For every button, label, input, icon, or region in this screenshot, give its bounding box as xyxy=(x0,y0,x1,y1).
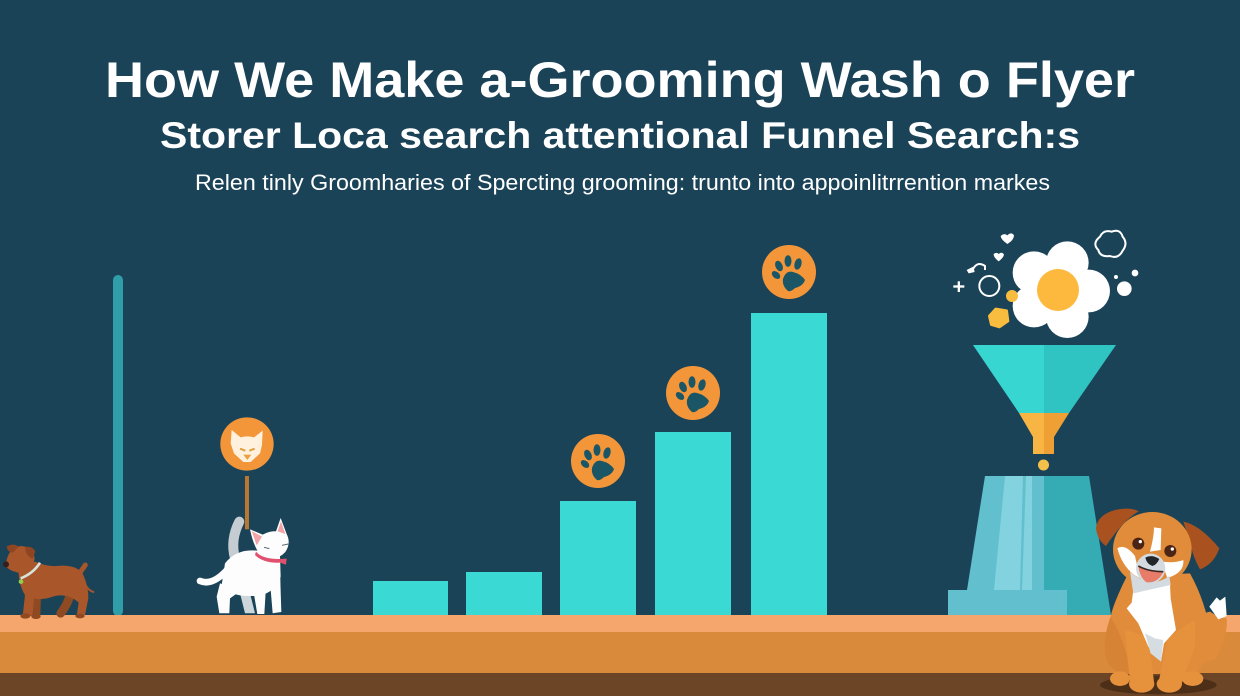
chart vertical axis xyxy=(113,275,123,616)
head xyxy=(250,518,289,558)
far legs xyxy=(238,567,281,613)
title: How We Make a-Grooming Wash o Flyer xyxy=(105,52,1135,108)
mouth xyxy=(1138,566,1163,582)
body xyxy=(18,562,88,616)
body xyxy=(222,550,281,596)
nose xyxy=(3,561,9,567)
legs xyxy=(217,570,281,614)
ears xyxy=(7,545,35,559)
tail xyxy=(1197,597,1227,663)
haunch shade xyxy=(1105,617,1130,674)
flower centre xyxy=(1037,269,1079,311)
collar xyxy=(255,552,287,565)
face markings xyxy=(1117,527,1183,593)
tail back xyxy=(200,567,230,582)
bar chart xyxy=(373,313,827,615)
large puppy xyxy=(1096,509,1227,694)
icon: paw badge 3 xyxy=(762,245,816,299)
body xyxy=(1105,573,1212,674)
head xyxy=(1113,512,1192,587)
white cat xyxy=(200,518,289,614)
nose xyxy=(1145,556,1159,566)
ears xyxy=(1096,509,1139,546)
petals xyxy=(1013,241,1110,338)
ears xyxy=(252,521,285,545)
front legs and paws xyxy=(1110,620,1203,693)
far legs and tail xyxy=(37,565,93,615)
head xyxy=(6,546,35,573)
sparkles xyxy=(953,233,1138,296)
pedestal xyxy=(948,476,1111,615)
paws xyxy=(20,612,85,619)
funnel drop xyxy=(1038,460,1049,470)
paw shadow xyxy=(1100,676,1217,694)
yellow pebbles xyxy=(989,291,1017,327)
icon: cat face badge xyxy=(220,417,274,471)
chest fur xyxy=(1127,583,1176,662)
icon: paw badge 1 xyxy=(571,434,625,488)
description line: Relen tinly Groomharies of Spercting grooming: trunto into appoinlitrrention markes xyxy=(195,170,1050,195)
pole xyxy=(245,476,249,529)
eyes xyxy=(264,544,288,549)
subtitle: Storer Loca search attentional Funnel Search:s xyxy=(160,115,1080,156)
funnel xyxy=(973,345,1116,454)
small brown dog xyxy=(3,545,93,619)
tail up xyxy=(233,522,239,558)
collar xyxy=(21,563,40,578)
cat badge with pole and white cat xyxy=(200,417,289,614)
ground platform xyxy=(0,615,1240,696)
icon: flower with sparkles xyxy=(953,231,1138,338)
icon: paw badge 2 xyxy=(666,366,720,420)
eyes xyxy=(1132,538,1144,550)
